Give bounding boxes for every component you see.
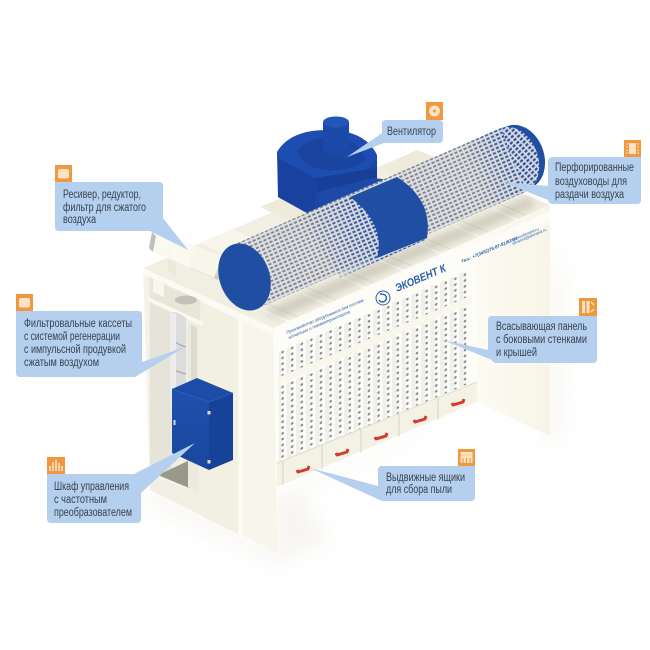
callout: control cabinet: преобразователем (54, 507, 132, 519)
callout: perforated ducts: раздачи воздуха (555, 189, 624, 201)
brand texts: аспирации и пневмотранспорта (287, 309, 351, 340)
fan motor (323, 116, 354, 160)
floor shadow (140, 230, 565, 565)
brand texts (285, 226, 548, 340)
callout: perforated ducts (503, 140, 641, 204)
brand texts: ekovent@ekovent.ru (511, 227, 548, 246)
shelf disc (175, 296, 197, 304)
right side wall (466, 205, 550, 436)
callout: suction panel: с боковыми стенками (496, 334, 587, 346)
callout: dust drawers: Выдвижные ящики (386, 472, 465, 484)
contacts: www.ekovent.ru (511, 226, 540, 242)
icon: fan (426, 102, 443, 120)
icon: equalizer (47, 457, 65, 474)
side grille (188, 322, 198, 492)
slogan: Производство оборудования для систем (285, 298, 364, 335)
filter cassette (170, 312, 186, 395)
callout: filter cassettes: с импульсной продувкой (24, 344, 126, 356)
perforated air duct (218, 124, 546, 310)
callout: dust drawers: для сбора пыли (386, 484, 452, 496)
icon: filter cassette (16, 294, 33, 311)
callout: dust drawers (310, 449, 475, 501)
callout: control cabinet: с частотным (54, 494, 107, 506)
callout: control cabinet (47, 443, 195, 523)
callout: control cabinet: Шкаф управления (54, 481, 129, 493)
callout: filter cassettes: с системой регенерации (24, 331, 120, 343)
pipe and receiver (149, 232, 228, 292)
perforated suction panel (277, 262, 472, 466)
duct front cap (209, 236, 280, 318)
phone: Тел.: +7(3452)76-87-81/82/32 (460, 235, 519, 264)
front header and frame (273, 211, 550, 552)
callout: receiver: Ресивер, редуктор, (63, 189, 141, 201)
callout: perforated ducts: воздуховоды для (555, 176, 627, 188)
duct mesh (233, 128, 525, 309)
callout: fan: Вентилятор (387, 126, 436, 138)
duct shadow on roof (262, 196, 536, 318)
shelf box (153, 279, 164, 297)
fan (277, 116, 392, 213)
left end face (143, 268, 277, 552)
drawer handles (297, 399, 464, 472)
roof (143, 150, 550, 335)
duct back end (484, 117, 554, 197)
icon: panel (579, 298, 597, 316)
callout: receiver: воздуха (63, 214, 96, 226)
icon: perforated duct (624, 140, 641, 157)
callout: suction panel (443, 298, 597, 363)
company name: ЭКОВЕНТ К (393, 262, 449, 295)
icon: drawers (458, 449, 475, 466)
filter compartment opening (148, 276, 203, 515)
logo (376, 291, 390, 305)
callout: receiver (55, 165, 188, 250)
drawers for dust (277, 382, 477, 487)
icon: receiver (55, 165, 72, 182)
callout: receiver: фильтр для сжатого (63, 202, 146, 214)
callout: filter cassettes: Фильтровальные кассеты (24, 318, 132, 330)
callout: fan (347, 102, 443, 157)
filter unit body (143, 150, 550, 552)
control cabinet (172, 378, 236, 470)
callout: filter cassettes: сжатым воздухом (24, 357, 99, 369)
callout: suction panel: Всасывающая панель (496, 321, 587, 333)
callout: filter cassettes (16, 294, 185, 377)
duct band (350, 177, 428, 258)
callout: suction panel: и крышей (496, 347, 537, 359)
